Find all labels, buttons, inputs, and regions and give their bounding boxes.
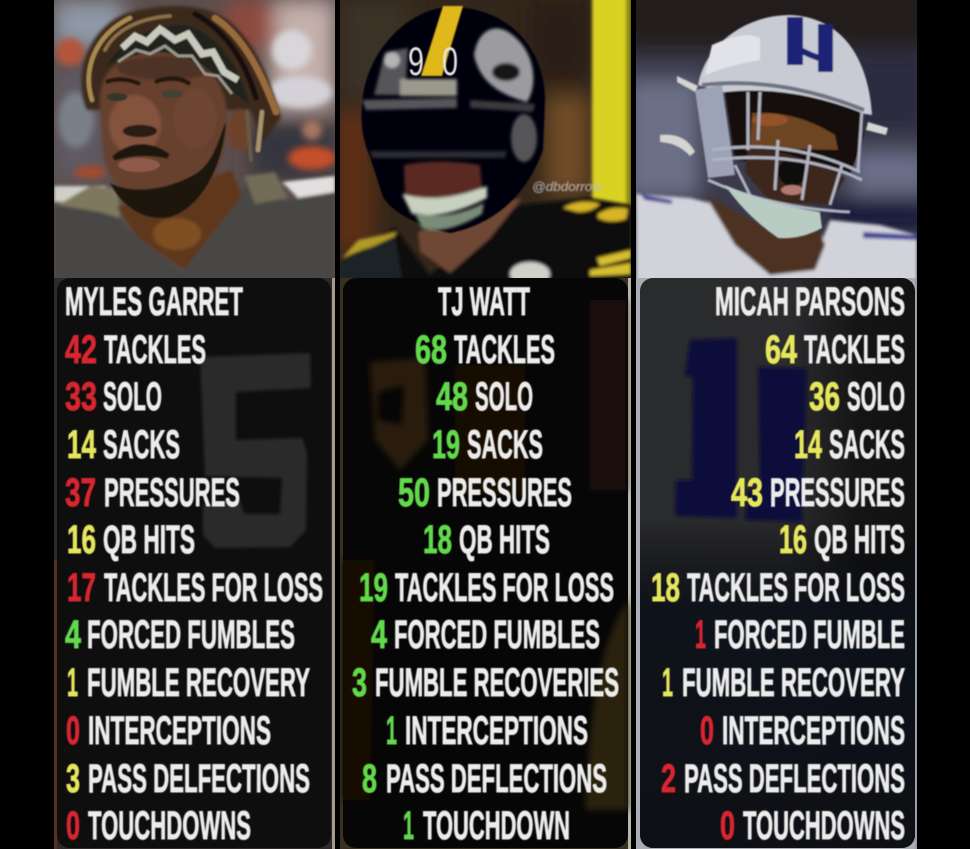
- stat: 16 QB hits: [67, 518, 195, 562]
- icon: zigzag headband: [106, 25, 249, 104]
- stat: 1 fumble recovery: 1: [662, 661, 673, 705]
- stat list: TJ Watt: [352, 280, 619, 848]
- stat: 4 forced fumbles: [371, 613, 600, 657]
- stat: 48 solo: SOLO: [475, 375, 533, 419]
- stat: 2 pass deflections: 2: [661, 757, 676, 801]
- stat: 18 QB hits: 18: [423, 518, 452, 562]
- stat: 3 fumble recoveries: [352, 661, 619, 705]
- stat: 42 tackles: TACKLES: [104, 328, 206, 372]
- stat: 3 pass delfections: 3: [66, 757, 80, 801]
- stat: 4 forced fumbles: 4: [371, 613, 388, 657]
- stat: 0 interceptions: [700, 709, 905, 753]
- stat: 68 tackles: TACKLES: [454, 328, 555, 372]
- stat: 37 pressures: PRESSURES: [104, 471, 240, 515]
- stat: 0 touchdowns: [720, 804, 905, 848]
- yellow goal post: [592, 0, 632, 207]
- stat: 4 forced fumbles: [65, 613, 295, 657]
- stat: 3 pass delfections: PASS DELFECTIONS: [88, 757, 310, 801]
- stat: 42 tackles: 42: [65, 328, 97, 372]
- stat: 37 pressures: 37: [65, 471, 96, 515]
- stat: 43 pressures: [731, 471, 905, 515]
- helmet number 90: 9: [408, 40, 424, 84]
- stat: 50 pressures: 50: [398, 471, 430, 515]
- stat: 8 pass deflections: 8: [362, 757, 377, 801]
- stat: 14 sacks: [67, 423, 180, 467]
- stat list: Myles Garrett: [65, 280, 323, 848]
- stat: 68 tackles: [415, 328, 555, 372]
- beard: [110, 122, 226, 218]
- stat: 33 solo: [65, 375, 162, 419]
- stat: 1 interceptions: [386, 709, 588, 753]
- stat: 18 tackles for loss: 18: [651, 566, 680, 610]
- stat: 68 tackles: 68: [415, 328, 447, 372]
- stat: 1 touchdown: TOUCHDOWN: [423, 804, 570, 848]
- stat: 43 pressures: 43: [731, 471, 763, 515]
- hair mass: [81, 6, 281, 142]
- stat: 48 solo: 48: [436, 375, 468, 419]
- stat: 1 forced fumble: 1: [695, 613, 706, 657]
- stat: 0 touchdowns: 0: [720, 804, 735, 848]
- stat: 1 touchdown: [403, 804, 570, 848]
- player name: TJ WATT: [438, 280, 530, 324]
- stat: 3 fumble recoveries: 3: [352, 661, 367, 705]
- stat: 17 tackles for loss: TACKLES FOR LOSS: [104, 566, 323, 610]
- stat: 1 fumble recovery: FUMBLE RECOVERY: [87, 661, 310, 705]
- stat: 1 forced fumble: [695, 613, 905, 657]
- stat: 0 touchdowns: TOUCHDOWNS: [88, 804, 251, 848]
- faded jersey details: [343, 300, 628, 810]
- hair strands: [89, 14, 276, 160]
- photographer watermark: @dbdorrow: [532, 179, 604, 194]
- stat: 4 forced fumbles: 4: [65, 613, 82, 657]
- stat: 48 solo: [436, 375, 533, 419]
- stat: 33 solo: 33: [65, 375, 97, 419]
- stat: 1 touchdown: 1: [403, 804, 414, 848]
- stat: 0 interceptions: INTERCEPTIONS: [88, 709, 271, 753]
- stat: 42 tackles: [65, 328, 206, 372]
- panel: TJ Watt: [330, 0, 632, 849]
- stat: 64 tackles: 64: [765, 328, 798, 372]
- icon: silver Cowboys helmet: [660, 15, 888, 238]
- stat: 19 tackles for loss: TACKLES FOR LOSS: [395, 566, 614, 610]
- photo: Myles Garrett: [54, 0, 336, 849]
- stat: 17 tackles for loss: [67, 566, 323, 610]
- photo: Micah Parsons: [636, 0, 917, 849]
- stat: 33 solo: SOLO: [103, 375, 162, 419]
- stat: 16 QB hits: [779, 518, 905, 562]
- faded jersey number: [200, 353, 311, 548]
- stat card background: [57, 278, 331, 848]
- stat: 14 sacks: 14: [67, 423, 96, 467]
- stat: 18 QB hits: QB HITS: [459, 518, 550, 562]
- stat: 16 QB hits: 16: [779, 518, 807, 562]
- stat list: Micah Parsons: [651, 280, 905, 848]
- stat: 14 sacks: SACKS: [829, 423, 905, 467]
- icon: black Steelers helmet: [362, 6, 545, 233]
- stat card background: [640, 278, 915, 848]
- panel: Myles Garrett: [54, 0, 336, 849]
- stat: 37 pressures: [65, 471, 240, 515]
- stat: 1 fumble recovery: [67, 661, 310, 705]
- stat: 3 fumble recoveries: FUMBLE RECOVERIES: [375, 661, 619, 705]
- stat: 17 tackles for loss: 17: [67, 566, 96, 610]
- icon: black Steelers helmet: 0: [442, 40, 458, 84]
- stat: 64 tackles: [765, 328, 905, 372]
- stat: 19 tackles for loss: [359, 566, 614, 610]
- stat: 8 pass deflections: PASS DEFLECTIONS: [386, 757, 607, 801]
- stat: 0 touchdowns: [66, 804, 251, 848]
- stat: 0 interceptions: 0: [66, 709, 80, 753]
- stat: 36 solo: [809, 375, 905, 419]
- stat: 0 interceptions: 0: [700, 709, 714, 753]
- face: [98, 52, 228, 191]
- stat: 18 tackles for loss: [651, 566, 905, 610]
- stat: 50 pressures: PRESSURES: [437, 471, 572, 515]
- stat: 1 interceptions: INTERCEPTIONS: [405, 709, 588, 753]
- stat card background: [343, 278, 628, 848]
- stat: 19 sacks: 19: [432, 423, 460, 467]
- faded jersey number 11: [675, 338, 807, 522]
- stat: 0 touchdowns: 0: [66, 804, 80, 848]
- jersey: [54, 186, 335, 278]
- stat: 19 sacks: SACKS: [467, 423, 543, 467]
- stat: 14 sacks: SACKS: [103, 423, 180, 467]
- neck: [117, 170, 242, 270]
- stat: 50 pressures: [398, 471, 572, 515]
- stat: 4 forced fumbles: FORCED FUMBLES: [87, 613, 295, 657]
- stat: 4 forced fumbles: FORCED FUMBLES: [394, 613, 600, 657]
- player name: MYLES GARRET: [65, 280, 243, 324]
- stat: 18 QB hits: [423, 518, 550, 562]
- stat: 3 pass delfections: [66, 757, 310, 801]
- eyes and brows: [106, 79, 140, 84]
- photo: TJ Watt: [330, 0, 632, 849]
- stat: 19 tackles for loss: 19: [359, 566, 388, 610]
- stat: 8 pass deflections: [362, 757, 607, 801]
- moustache: [114, 147, 168, 158]
- stat: 16 QB hits: 16: [67, 518, 96, 562]
- jersey: [340, 196, 631, 278]
- stat: 36 solo: SOLO: [847, 375, 905, 419]
- stat: 36 solo: 36: [809, 375, 840, 419]
- stat: 14 sacks: 14: [794, 423, 822, 467]
- stat: 0 interceptions: [66, 709, 271, 753]
- stat: 1 interceptions: 1: [386, 709, 397, 753]
- stat: 19 sacks: [432, 423, 543, 467]
- white jersey: [636, 192, 917, 278]
- stat: 14 sacks: [794, 423, 905, 467]
- stat: 1 fumble recovery: 1: [67, 661, 78, 705]
- panel: Micah Parsons: [636, 0, 917, 849]
- stat: 16 QB hits: QB HITS: [103, 518, 195, 562]
